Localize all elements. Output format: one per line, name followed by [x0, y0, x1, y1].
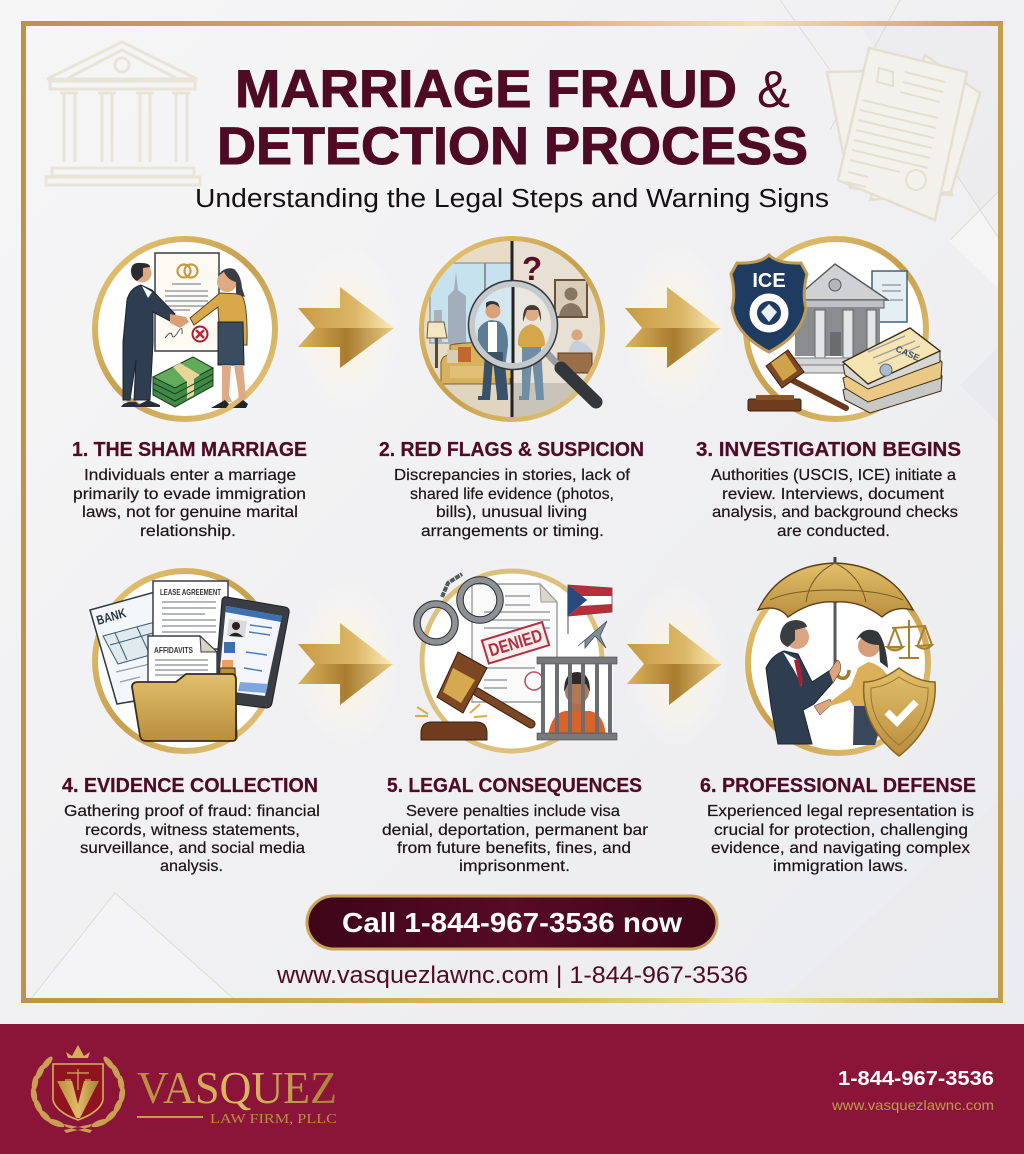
gavel	[748, 350, 846, 411]
affidavits page: AFFIDAVITS	[154, 645, 193, 655]
icon: sham marriage handshake	[85, 229, 285, 429]
step 6 text	[700, 775, 976, 875]
flag and airplane	[568, 585, 612, 648]
subtitle: Understanding the Legal Steps and Warning Signs	[195, 185, 829, 213]
icon: red flags magnifier	[419, 236, 605, 422]
footer website: www.vasquezlawnc.com	[831, 1097, 994, 1113]
step 5 text: from future benefits, fines, and	[397, 840, 631, 857]
arrow: step 4 to 5	[296, 579, 400, 749]
marriage certificate	[155, 253, 219, 351]
step 1 text	[72, 439, 307, 540]
arrow: step 2 to 3	[623, 243, 727, 413]
call to action button: Call 1-844-967-3536 now	[342, 907, 682, 938]
right half: office	[512, 240, 602, 418]
magnifying glass	[468, 280, 596, 402]
cash stack	[153, 357, 213, 407]
step 3 text: 3. INVESTIGATION BEGINS	[696, 439, 961, 461]
step 1 text: 1. THE SHAM MARRIAGE	[72, 439, 307, 461]
step 6 text: 6. PROFESSIONAL DEFENSE	[700, 775, 976, 797]
step 3 text: are conducted.	[777, 523, 890, 540]
step 1 text: primarily to evade immigration	[73, 486, 306, 503]
decorative paper stack watermark	[827, 48, 980, 220]
denied document	[472, 584, 557, 702]
gavel	[415, 652, 531, 740]
firm logo	[30, 1045, 126, 1133]
step 6 text: immigration laws.	[773, 858, 908, 875]
step 3 text: review. Interviews, document	[722, 486, 945, 503]
wreath	[30, 1055, 126, 1133]
umbrella	[758, 557, 913, 678]
step 6 text: evidence, and navigating complex	[711, 840, 970, 857]
firm name: VASQUEZ	[137, 1063, 337, 1113]
question mark: ?	[522, 250, 542, 287]
step 2 text: 2. RED FLAGS & SUSPICION	[379, 439, 644, 461]
lease agreement: LEASE AGREEMENT	[160, 588, 221, 597]
arrow: step 1 to 2	[296, 243, 400, 413]
client in yellow top	[824, 630, 888, 745]
website and phone line: www.vasquezlawnc.com | 1-844-967-3536	[276, 962, 748, 989]
footer band	[0, 1024, 1024, 1154]
step 2 text	[379, 439, 644, 540]
man in suit	[121, 263, 189, 407]
step 4 text	[62, 775, 320, 875]
icon: professional defense	[738, 557, 938, 763]
step 6 text: crucial for protection, challenging	[714, 822, 968, 839]
step 2 text: bills), unusual living	[436, 504, 587, 521]
footer phone: 1-844-967-3536	[838, 1068, 994, 1090]
firm name rule	[137, 1116, 203, 1118]
title: &	[757, 61, 790, 119]
step 5 text: Severe penalties include visa	[406, 803, 620, 820]
step 3 text	[696, 439, 961, 540]
DENIED stamp: DENIED	[486, 625, 545, 660]
ICE shield badge: ICE	[752, 270, 786, 292]
step 1 text: relationship.	[140, 523, 236, 540]
crown	[66, 1045, 90, 1058]
step 4 text: analysis.	[160, 858, 223, 875]
handcuffs	[417, 574, 500, 642]
step 5 text: imprisonment.	[459, 858, 570, 875]
arrow: step 5 to 6	[625, 579, 729, 749]
step 5 text	[382, 775, 649, 875]
step 6 text: Experienced legal representation is	[707, 803, 974, 820]
V emblem	[57, 1081, 99, 1118]
step 4 text: records, witness statements,	[85, 822, 300, 839]
step 1 text: Individuals enter a marriage	[84, 467, 296, 484]
step 2 text: arrangements or timing.	[421, 523, 604, 540]
step 2 text: shared life evidence (photos,	[410, 486, 614, 503]
title: DETECTION PROCESS	[217, 117, 808, 176]
step 1 text: laws, not for genuine marital	[82, 504, 298, 521]
step 5 text: 5. LEGAL CONSEQUENCES	[387, 775, 642, 797]
title	[217, 60, 808, 176]
icon: evidence collection	[85, 561, 289, 761]
lease agreement	[153, 581, 228, 649]
folder	[132, 668, 237, 741]
step 4 text: 4. EVIDENCE COLLECTION	[62, 775, 318, 797]
step 5 text: denial, deportation, permanent bar	[382, 822, 649, 839]
ICE shield badge	[731, 255, 807, 352]
couple standing through the lens	[478, 345, 544, 400]
case files: CASE	[894, 344, 921, 363]
firm subtitle: LAW FIRM, PLLC	[210, 1112, 337, 1127]
step 4 text: Gathering proof of fraud: financial	[64, 803, 320, 820]
woman in yellow top	[190, 268, 248, 408]
bank statement	[90, 592, 200, 704]
tablet	[214, 597, 289, 708]
step 4 text: surveillance, and social media	[80, 840, 305, 857]
bank statement: BANK	[95, 605, 128, 628]
prison cage with inmate	[537, 657, 617, 740]
scales of justice	[887, 620, 932, 658]
decorative courthouse watermark	[46, 42, 200, 185]
step 3 text: analysis, and background checks	[712, 504, 958, 521]
document behind building	[872, 271, 907, 322]
affidavits page	[148, 636, 217, 690]
case files	[843, 328, 942, 413]
icon: investigation begins	[731, 229, 942, 429]
scales	[65, 1069, 91, 1090]
left half: living room	[424, 240, 512, 420]
shield	[53, 1064, 103, 1120]
icon: legal consequences	[412, 561, 617, 761]
step 2 text: Discrepancies in stories, lack of	[394, 467, 631, 484]
courthouse	[790, 264, 888, 373]
step 3 text: Authorities (USCIS, ICE) initiate a	[711, 467, 956, 484]
attorney in suit	[766, 620, 841, 744]
title: MARRIAGE FRAUD	[235, 60, 737, 119]
call to action button	[307, 896, 717, 949]
shield with check	[864, 668, 935, 756]
